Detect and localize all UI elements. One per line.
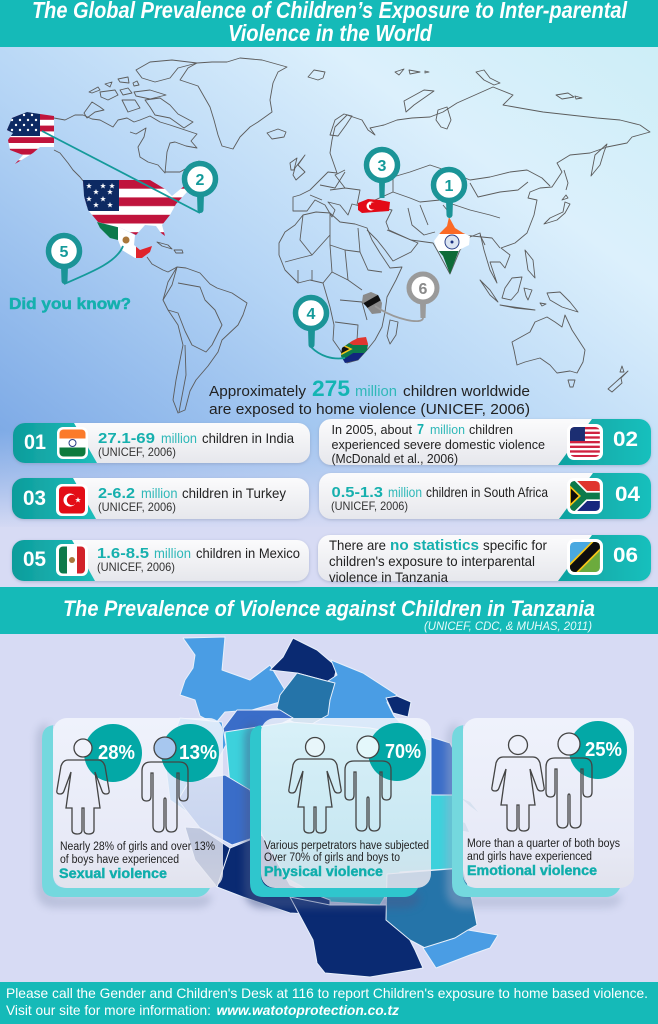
icon: girl [57, 739, 109, 834]
stat card 06 Tanzania: There are [329, 537, 386, 553]
Tanzania regional map [165, 637, 498, 977]
text: sexual violence: Sexual violence [59, 866, 168, 881]
stat card 06 Tanzania: specific for [483, 537, 547, 553]
text: physical violence: Physical violence [264, 864, 384, 879]
footer banner: Please call the Gender and Children's Desk at 116 to report Children's exposure to home based violence. [6, 985, 648, 1001]
stat card 04 South Africa: 04 [615, 483, 640, 506]
stat card 03 Turkey [12, 478, 309, 519]
text: sexual violence: of boys have experienced [60, 854, 179, 866]
section banner: Tanzania [0, 587, 658, 634]
text: physical violence: Various perpetrators have subjected [264, 840, 429, 852]
title banner [0, 0, 658, 47]
pin 2: 2 [196, 172, 205, 189]
stat card 06 Tanzania: violence in Tanzania [329, 569, 448, 585]
text: physical violence [264, 840, 429, 879]
stat card 04 South Africa: children in South Africa [426, 484, 548, 500]
stat card 03 Turkey: 03 [23, 487, 46, 510]
worldwide statistic: are exposed to home violence (UNICEF, 2006) [209, 401, 530, 418]
panel: emotional violence [446, 718, 634, 908]
stat card 01 India: children in India [202, 430, 294, 446]
map flag: Tanzania [362, 292, 382, 314]
section banner: Tanzania: (UNICEF, CDC, & MUHAS, 2011) [424, 619, 592, 633]
pin 5 [48, 236, 80, 284]
panel: physical violence [244, 718, 431, 908]
stat card 06 Tanzania: children's exposure to interparental [329, 553, 535, 569]
stat card 04 South Africa [319, 473, 651, 519]
stat card 02 USA: 02 [613, 428, 638, 451]
map flag: Mexico [97, 222, 152, 258]
stat card 03 Turkey: children in Turkey [182, 485, 286, 501]
pin 6 [409, 274, 437, 318]
teal circle 28%: 28% [98, 742, 135, 764]
leader line: Alaska to pin 2 [42, 131, 200, 213]
stat card 01 India: 27.1-69 [98, 430, 155, 447]
stat card 01 India: (UNICEF, 2006) [98, 445, 176, 459]
worldwide statistic: 275 [312, 376, 350, 401]
title banner: Violence in the World [228, 20, 433, 46]
section banner: Tanzania: The Prevalence of Violence against Children in Tanzania [63, 596, 595, 621]
stat card 04 South Africa: million [388, 484, 422, 500]
map flag: Alaska [7, 112, 54, 164]
teal circle 25% [569, 721, 627, 779]
stat card 02 USA [319, 419, 651, 466]
stat card 01 India [13, 423, 310, 463]
icon: boy [345, 736, 391, 831]
stat card 01 India: 01 [24, 431, 46, 454]
teal circle 70%: 70% [385, 741, 421, 763]
teal circle 13%: 13% [179, 742, 217, 764]
pin 5: 5 [60, 244, 69, 261]
stat card 03 Turkey: (UNICEF, 2006) [98, 500, 176, 514]
leader line: South Africa to pin 4 [311, 347, 345, 359]
map flag: India [434, 218, 470, 274]
text: emotional violence: More than a quarter of both boys [467, 838, 620, 850]
stat card 05 Mexico: (UNICEF, 2006) [97, 560, 175, 574]
text: physical violence: Over 70% of girls and boys to [264, 852, 400, 864]
teal circle 13% [161, 724, 219, 782]
text: emotional violence: Emotional violence [467, 863, 598, 878]
stat card 02 USA: million [430, 422, 465, 437]
worldwide statistic [209, 376, 530, 418]
pin 4 [296, 298, 326, 348]
stat card 04 South Africa: (UNICEF, 2006) [331, 499, 408, 513]
world map outline [54, 58, 650, 413]
panel: sexual violence [36, 718, 223, 908]
pin 2 [184, 164, 216, 213]
icon: boy [546, 733, 592, 828]
stat card 03 Turkey: million [141, 485, 178, 501]
pin 1 [434, 170, 464, 218]
text: emotional violence [467, 838, 620, 878]
worldwide statistic: children worldwide [403, 383, 530, 400]
pin 3: 3 [378, 158, 387, 175]
teal circle 70% [368, 723, 426, 781]
text: sexual violence [59, 841, 215, 881]
footer banner: Visit our site for more information: [6, 1002, 211, 1018]
icon: girl [492, 736, 544, 831]
text: sexual violence: Nearly 28% of girls and over 13% [60, 841, 215, 853]
stat card 02 USA: In 2005, about [332, 422, 412, 437]
map flag: Turkey [358, 199, 390, 213]
map flag: South Africa [341, 337, 368, 363]
teal circle 25%: 25% [585, 739, 622, 761]
stat card 05 Mexico: children in Mexico [196, 545, 300, 561]
pin 1: 1 [445, 178, 454, 195]
stat card 05 Mexico: million [154, 545, 191, 561]
stat card 02 USA: 7 [417, 421, 424, 438]
leader line: Tanzania to pin 6 [375, 306, 423, 321]
stat card 02 USA: children [469, 422, 513, 437]
footer banner [0, 982, 658, 1024]
stat card 06 Tanzania [318, 535, 651, 585]
stat card 05 Mexico [12, 540, 309, 581]
stat card 04 South Africa: 0.5-1.3 [332, 484, 383, 501]
icon: boy [142, 737, 188, 832]
map flag: USA [83, 180, 187, 236]
stat card 03 Turkey: 2-6.2 [98, 485, 135, 502]
stat card 06 Tanzania: no statistics [390, 537, 479, 554]
leader line: Mexico to pin 5 [64, 246, 123, 284]
stat card 06 Tanzania: 06 [613, 544, 638, 567]
stat card 02 USA: (McDonald et al., 2006) [332, 451, 458, 466]
stat card 05 Mexico: 1.6-8.5 [97, 545, 149, 562]
icon: girl [289, 738, 341, 833]
stat card 05 Mexico: 05 [23, 548, 46, 571]
text: emotional violence: and girls have experienced [467, 851, 592, 863]
did you know label: Did you know? [9, 296, 131, 313]
pin 3 [366, 150, 398, 198]
pin 4: 4 [307, 306, 316, 323]
pin 6: 6 [419, 281, 428, 298]
footer banner: www.watotoprotection.co.tz [216, 1002, 399, 1018]
stat card 01 India: million [161, 430, 197, 446]
stat card 02 USA: experienced severe domestic violence [332, 437, 545, 452]
teal circle 28% [84, 724, 142, 782]
worldwide statistic: million [355, 383, 397, 400]
worldwide statistic: Approximately [209, 383, 307, 400]
